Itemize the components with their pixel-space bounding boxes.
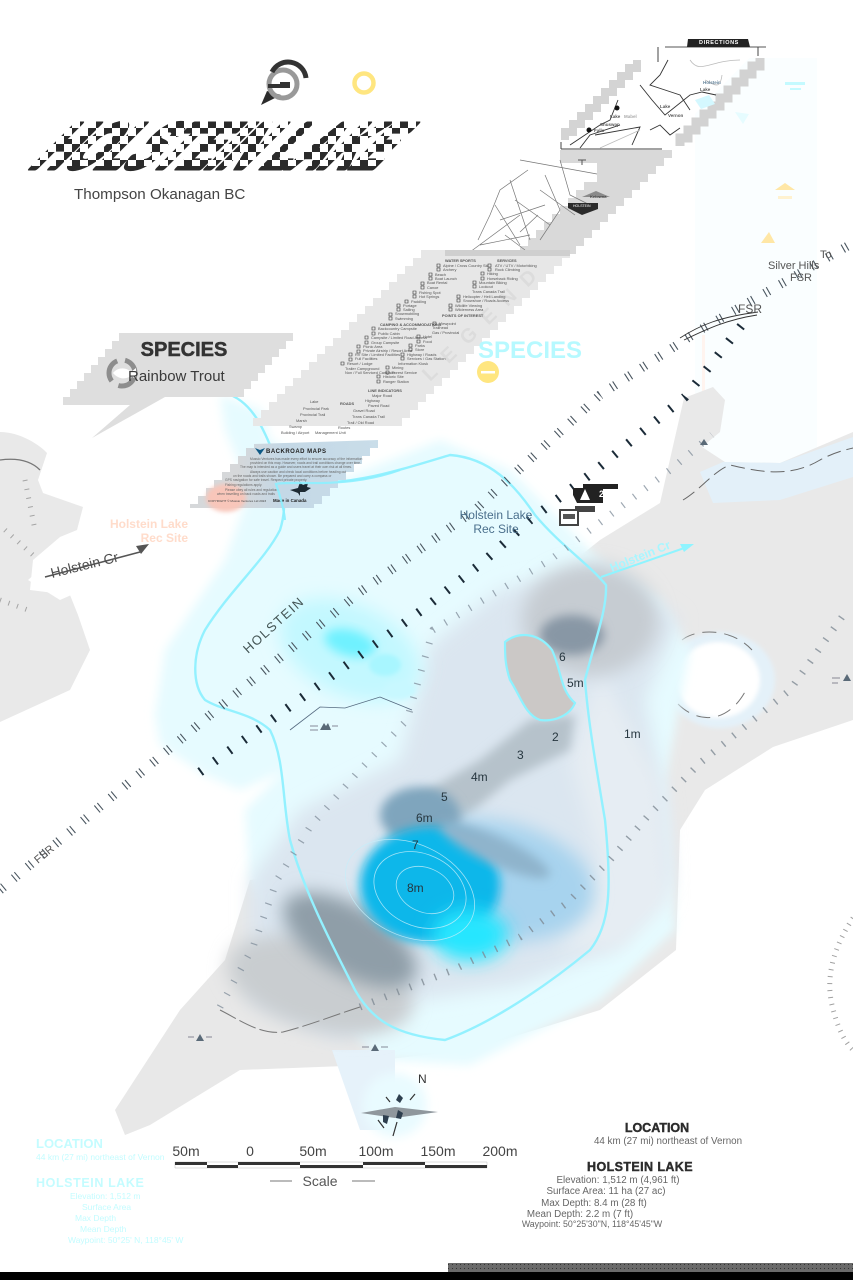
depth labels: 5 xyxy=(441,790,448,804)
backroad maps panel: COPYRIGHT © Mussio Ventures Ltd 2023 xyxy=(208,499,266,503)
legend panel: Trans Canada Trail xyxy=(472,289,505,294)
legend panel: Swamp xyxy=(289,424,302,429)
label: holstein lake rec site xyxy=(460,508,533,536)
legend panel: Beach xyxy=(435,272,446,277)
depth labels: 6m xyxy=(416,811,433,825)
legend panel: Swimming xyxy=(395,316,413,321)
title: HOLSTEIN LAKE xyxy=(14,110,434,182)
location text, lower right: Elevation: 1,512 m (4,961 ft) xyxy=(556,1175,680,1186)
land: left shore xyxy=(0,432,90,722)
depth labels: 1m xyxy=(624,727,641,741)
ghost location text, lower left: Elevation: 1,512 m xyxy=(70,1191,140,1201)
legend panel: CAMPING & ACCOMMODATIONS xyxy=(380,322,442,327)
depth labels: 6 xyxy=(559,650,566,664)
road: double hash trail xyxy=(0,243,853,890)
label: holstein lake rec site: Holstein Lake xyxy=(460,508,533,522)
subtitle: Thompson Okanagan BC xyxy=(74,186,245,203)
ghost location text, lower left: 44 km (27 mi) northeast of Vernon xyxy=(36,1152,165,1162)
ghost location text, lower left: Surface Area xyxy=(82,1202,131,1212)
legend panel: Private Airstrip / Resort Area xyxy=(363,348,413,353)
compass xyxy=(361,1072,438,1137)
gray band with bc map marker: HOLSTEIN xyxy=(573,204,591,208)
backroad maps panel: BACKROAD MAPS xyxy=(266,449,326,455)
white point: east shore xyxy=(665,632,775,728)
shoreline xyxy=(195,393,609,1040)
legend panel: Paved Road xyxy=(368,403,389,408)
ghost label: rec site xyxy=(110,517,188,545)
icon: location pin with fish xyxy=(261,62,306,105)
backroad maps panel: Mussio Ventures has made every effort to ensure accuracy of the information xyxy=(250,457,362,461)
legend panel: Alpine / Cross Country Ski xyxy=(443,263,489,268)
scale bar: 0 xyxy=(246,1143,254,1159)
road labels: FSR xyxy=(738,302,762,316)
backroad maps panel: The map is intended as a guide and users travel at their own risk at all times. xyxy=(240,465,352,469)
label: holstein lake rec site: Rec Site xyxy=(473,522,519,536)
icons: campsite and boat launch xyxy=(560,484,618,525)
locator map: directions inset: Lake xyxy=(610,114,621,119)
locator map: directions inset: Holstein xyxy=(703,80,721,85)
legend panel: Provincial Park xyxy=(303,406,329,411)
ghost species label: SPECIES xyxy=(478,337,582,364)
legend panel: Building / Airport xyxy=(281,430,310,435)
legend panel: Parks xyxy=(415,343,425,348)
locator map: directions inset: Falls xyxy=(594,128,605,133)
legend panel: WATER SPORTS xyxy=(445,258,476,263)
legend panel: Horseback Riding xyxy=(487,276,518,281)
road: gray dashes east xyxy=(360,610,847,1007)
legend panel: Marsh xyxy=(296,418,307,423)
scale bar: Scale xyxy=(302,1173,338,1189)
land: right shore xyxy=(380,387,853,1060)
island xyxy=(505,635,575,720)
legend panel: Rock Climbing xyxy=(495,267,520,272)
icons: trees xyxy=(188,439,851,1051)
backroad maps panel: Please obey all rules and regulations xyxy=(225,488,279,492)
scale bar: 200m xyxy=(482,1143,518,1159)
legend panel: Viewpoint xyxy=(439,321,457,326)
backroad maps panel xyxy=(190,440,378,512)
locator map: directions inset: DIRECTIONS xyxy=(699,40,739,46)
scale bar xyxy=(172,1143,518,1189)
legend panel: Wilderness Area xyxy=(455,307,484,312)
legend panel: Provincial Trail xyxy=(300,412,325,417)
ghost location text, lower left: Mean Depth xyxy=(80,1224,127,1234)
bottom bar xyxy=(0,1263,853,1280)
legend panel: Lake xyxy=(310,399,318,404)
legend panel: Major Road xyxy=(372,393,392,398)
scale bar: 50m xyxy=(299,1143,327,1159)
legend panel: Lookout xyxy=(479,284,494,289)
legend panel: Food xyxy=(423,339,432,344)
backroad maps panel: Made in Canada xyxy=(273,498,307,503)
label: fsr on road, southwest: FSR xyxy=(32,843,57,866)
depth labels xyxy=(407,650,641,895)
legend panel: Archery xyxy=(443,267,456,272)
legend panel: Resort / Lodge xyxy=(347,361,373,366)
icon: fish xyxy=(109,360,136,386)
location text, lower right: Mean Depth: 2.2 m (7 ft) xyxy=(527,1209,633,1220)
legend panel: Sailing xyxy=(403,307,415,312)
legend panel: Boat Rental xyxy=(427,280,447,285)
legend panel: Full Facilities xyxy=(355,356,378,361)
locator map: directions inset: Lake xyxy=(660,104,671,109)
backroad maps panel: Fishing regulations apply. xyxy=(225,483,262,487)
legend panel: Gas / Provincial xyxy=(432,330,459,335)
legend panel: Wildlife Viewing xyxy=(455,303,482,308)
species callout xyxy=(63,325,300,438)
legend panel: Public Cabin xyxy=(378,331,400,336)
backroad maps panel: provided on this map. However, roads and trail conditions change over time. xyxy=(250,461,361,465)
legend panel: Management Unit xyxy=(315,430,347,435)
legend panel: Trail / Old Road xyxy=(347,420,374,425)
compass: N xyxy=(418,1072,427,1086)
road labels: FSR xyxy=(790,272,812,284)
legend panel: LEGEND xyxy=(418,266,541,386)
legend panel: Ranger Station xyxy=(383,379,409,384)
legend panel: Historic Site xyxy=(383,374,404,379)
locator map: directions inset: Lake xyxy=(700,87,711,92)
legend panel: Gravel Road xyxy=(353,408,375,413)
location text, lower right: HOLSTEIN LAKE xyxy=(587,1160,693,1174)
bay: upper right channel xyxy=(700,437,853,503)
label: holstein cr west, white channel: Holstein Cr xyxy=(49,549,120,581)
legend panel: Snowmobiling xyxy=(395,311,419,316)
backroad maps panel: Always use caution and check local conditions before heading out xyxy=(250,470,346,474)
legend panel: Trans Canada Trail xyxy=(352,414,385,419)
legend panel: Non / Full Serviced Campsite xyxy=(345,370,395,375)
ghost location text, lower left: Max Depth xyxy=(75,1213,116,1223)
legend panel: Canoe xyxy=(427,285,438,290)
legend panel: Campsite / Limited Road Access xyxy=(371,335,427,340)
gray band with bc map marker: Kelowna xyxy=(590,194,607,199)
icon: yellow ring xyxy=(354,74,374,92)
ghost label: rec site: Holstein Lake xyxy=(110,517,188,531)
legend panel: Highway / Roads xyxy=(407,352,436,357)
legend panel: ATV / UTV / Motorbiking xyxy=(495,263,537,268)
ghost location text, lower left: LOCATION xyxy=(36,1136,103,1151)
species name: Rainbow Trout xyxy=(128,368,226,385)
legend panel: SERVICES xyxy=(497,258,517,263)
legend panel xyxy=(253,250,570,435)
ghost label: rec site: Rec Site xyxy=(141,531,188,545)
label: holstein road: HOLSTEIN xyxy=(240,594,307,656)
scale bar: 150m xyxy=(420,1143,456,1159)
creek: holstein cr outflow xyxy=(601,538,694,577)
pale cyan ghost panel: upper right xyxy=(695,58,817,508)
road labels: To xyxy=(820,249,832,261)
legend panel: Portage xyxy=(403,303,417,308)
label: holstein cr west, white channel xyxy=(28,528,150,600)
location text, lower right xyxy=(522,1121,742,1229)
ghost species label xyxy=(477,337,582,383)
legend panel: Services / Gas Station xyxy=(407,356,446,361)
locator map: directions inset: Mabel xyxy=(624,114,637,119)
legend panel: Highway xyxy=(365,398,380,403)
locator map: directions inset xyxy=(560,39,766,149)
location text, lower right: LOCATION xyxy=(625,1121,689,1135)
legend panel: Forest Service xyxy=(392,370,417,375)
legend panel: Hotel xyxy=(423,334,432,339)
legend panel: Trailer Campground xyxy=(345,366,379,371)
ghost location text, lower left: Waypoint: 50°25' N, 118°45' W xyxy=(68,1235,183,1245)
locator map: directions inset: Shuswap xyxy=(600,122,620,127)
gray band with bc map marker xyxy=(470,150,672,254)
road: black dashed road xyxy=(200,325,742,772)
legend panel: Picnic Area xyxy=(363,344,383,349)
legend panel: Boat Launch xyxy=(435,276,457,281)
legend panel: Helicopter / Heli Landing xyxy=(463,294,505,299)
creek: holstein cr outflow: Holstein Cr xyxy=(608,538,673,575)
legend panel: Fishing Spot xyxy=(419,290,442,295)
depth labels: 4m xyxy=(471,770,488,784)
location text, lower right: Waypoint: 50°25'30"N, 118°45'45"W xyxy=(522,1219,663,1229)
road labels: Silver Hills xyxy=(768,260,820,272)
legend panel: Backcountry Campsite xyxy=(378,326,417,331)
ghost location text, lower left: HOLSTEIN LAKE xyxy=(36,1176,144,1190)
depth labels: 5m xyxy=(567,676,584,690)
legend panel: POINTS OF INTEREST xyxy=(442,313,484,318)
depth labels: 2 xyxy=(552,730,559,744)
scale bar: 50m xyxy=(172,1143,200,1159)
legend panel: Paddling xyxy=(411,299,426,304)
contour lines: land xyxy=(0,312,853,1050)
scale bar: 100m xyxy=(358,1143,394,1159)
legend panel: RV Site / Limited Facilities xyxy=(355,352,400,357)
backroad maps panel: on the roads and trails shown. Be prepared and carry a compass or xyxy=(233,474,332,478)
location text, lower right: Surface Area: 11 ha (27 ac) xyxy=(546,1186,666,1197)
location text, lower right: Max Depth: 8.4 m (28 ft) xyxy=(541,1198,647,1209)
road labels xyxy=(738,249,832,316)
backroad maps panel: when travelling on back roads and trails xyxy=(217,492,275,496)
ghost location text, lower left xyxy=(36,1136,183,1245)
legend panel: Information Kiosk xyxy=(398,361,428,366)
species heading: SPECIES xyxy=(141,339,227,361)
legend panel: Trailhead xyxy=(432,325,448,330)
legend panel: Hiking xyxy=(487,271,498,276)
legend panel: Mountain Biking xyxy=(479,280,507,285)
legend panel: Snowshoe / Roads Access xyxy=(463,298,509,303)
depth labels: 8m xyxy=(407,881,424,895)
locator map: directions inset: Vernon xyxy=(668,113,684,118)
depth labels: 3 xyxy=(517,748,524,762)
road: gray dashes west xyxy=(220,435,712,1007)
icons: campsite and boat launch: 2 xyxy=(599,489,604,499)
location text, lower right: 44 km (27 mi) northeast of Vernon xyxy=(594,1136,742,1147)
legend panel: Mining xyxy=(392,365,403,370)
lake: pale water body xyxy=(155,395,690,1065)
lake: bay tail xyxy=(332,1050,395,1130)
legend panel: Store xyxy=(415,347,424,352)
depth map xyxy=(217,564,680,1053)
land: lower shore xyxy=(115,870,400,1135)
legend panel: ROADS xyxy=(340,401,354,406)
legend panel: Hot Springs xyxy=(419,294,439,299)
legend panel: Group Campsite xyxy=(371,340,399,345)
legend panel: LINE INDICATORS xyxy=(368,388,402,393)
depth labels: 7 xyxy=(412,838,419,852)
legend panel: Routes xyxy=(338,425,350,430)
top of lake shore over panel xyxy=(276,470,400,520)
backroad maps panel: GPS navigation for safe travel. Respect private property. xyxy=(225,478,307,482)
